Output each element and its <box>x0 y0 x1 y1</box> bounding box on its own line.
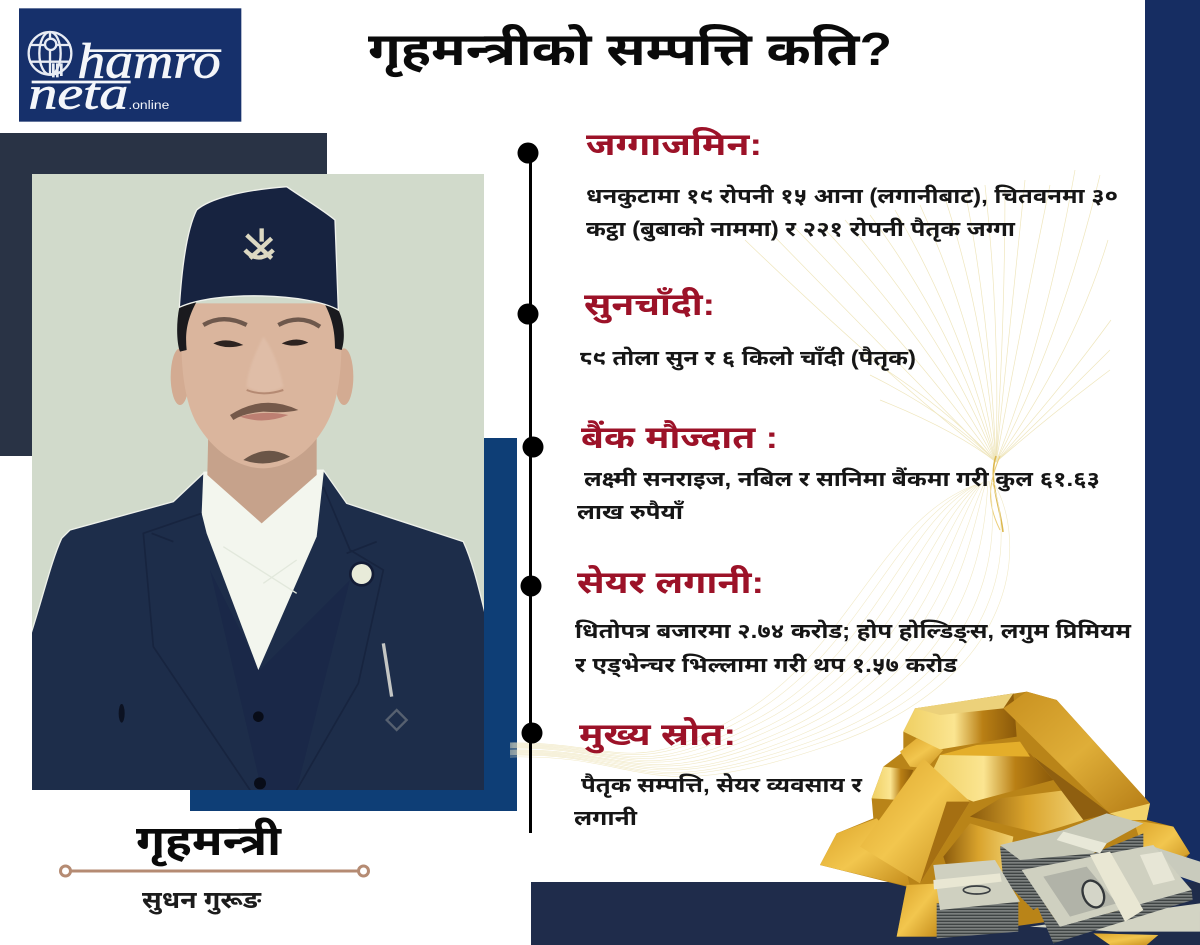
section: gold and silver <box>579 287 916 371</box>
buttons <box>253 711 264 722</box>
dark backing panel <box>0 133 327 456</box>
bottom navy band <box>531 882 1200 945</box>
section: gold and silver: सुनचाँदी: <box>584 287 715 324</box>
face <box>181 303 341 468</box>
section: land: कट्ठा (बुबाको नाममा) र २२१ रोपनी पैतृक जग्गा <box>586 217 1016 242</box>
caption: home minister <box>60 817 368 915</box>
section: share investment: र एड्भेन्चर भिल्लामा गरी थप १.५७ करोड <box>575 653 958 678</box>
section: main source <box>574 717 863 830</box>
caption: home minister: सुधन गुरूङ <box>142 887 262 915</box>
section: land <box>586 127 1118 242</box>
section: land: जग्गाजमिन: <box>586 127 762 162</box>
section: main source: मुख्य स्रोत: <box>579 717 736 754</box>
title: गृहमन्त्रीको सम्पत्ति कति? <box>368 23 892 78</box>
logo wordmark <box>28 32 221 118</box>
neck <box>207 430 317 523</box>
gold bars <box>820 692 1190 945</box>
moustache <box>230 403 298 420</box>
nose <box>247 390 283 393</box>
timeline <box>518 142 544 833</box>
logo wordmark: hamro <box>77 32 221 88</box>
lapels <box>143 487 383 790</box>
section: share investment: धितोपत्र बजारमा २.७४ करोड; होप होल्डिङ्स, लगुम प्रिमियम <box>575 619 1131 644</box>
section: share investment: सेयर लगानी: <box>577 565 764 600</box>
section: bank balance <box>577 420 1100 524</box>
cash stacks <box>933 813 1200 943</box>
brows and eyes <box>203 319 320 327</box>
section: bank balance: लाख रुपैयाँ <box>577 500 685 524</box>
section: share investment <box>575 565 1131 678</box>
section: main source: लगानी <box>574 806 638 830</box>
ears <box>170 348 187 405</box>
cap badge <box>245 228 273 258</box>
section: main source: पैतृक सम्पत्ति, सेयर व्यवसाय र <box>581 773 863 798</box>
vest <box>210 570 350 790</box>
pocket badge <box>387 710 407 730</box>
shirt collar <box>202 470 324 670</box>
mouth <box>240 413 288 420</box>
hair <box>177 302 344 352</box>
decorative gold line fan <box>510 170 1111 777</box>
portrait photo <box>23 174 487 803</box>
caption: home minister: गृहमन्त्री <box>136 817 282 867</box>
logo: hamro neta online <box>19 8 241 122</box>
pen <box>383 643 392 697</box>
section: bank balance: बैंक मौज्दात : <box>581 420 778 455</box>
logo wordmark: .online <box>128 98 169 112</box>
jacket <box>23 470 487 803</box>
section: bank balance: लक्ष्मी सनराइज, नबिल र सानिमा बैंकमा गरी कुल ६१.६३ <box>584 467 1100 492</box>
right navy band <box>1145 0 1200 945</box>
lapel pin <box>349 561 374 587</box>
illustration: gold bars and cash <box>820 692 1200 945</box>
section: gold and silver: ८९ तोला सुन र ६ किलो चाँदी (पैतृक) <box>579 346 916 371</box>
goatee <box>243 451 290 463</box>
section: land: धनकुटामा १९ रोपनी १५ आना (लगानीबाट), चितवनमा ३० <box>586 184 1118 209</box>
blue backing panel <box>190 438 517 811</box>
icon: globe emblem <box>29 32 71 77</box>
logo wordmark: neta <box>28 68 128 118</box>
cap <box>179 187 338 310</box>
